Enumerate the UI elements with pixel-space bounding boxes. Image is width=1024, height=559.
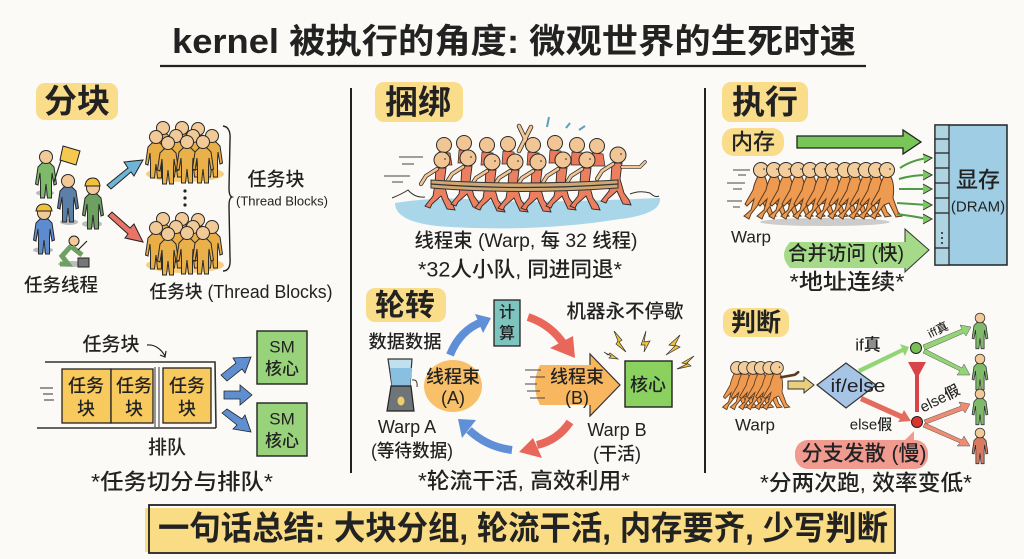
label: Warp A: (等待数据): [371, 441, 453, 461]
shape: thread bundle A: [424, 360, 482, 412]
label: 任务块 (Thread Blocks): 任务块 (Thread Blocks): [150, 282, 332, 302]
shape: thread bundle A: 线程束: [426, 367, 480, 387]
arrows: queue to SM cores: [221, 357, 252, 432]
label: else假: else假: [850, 416, 892, 434]
icon: dots: [183, 189, 187, 207]
label: 任务块 Thread Blocks: [236, 168, 328, 208]
caption: 轮流干活: *轮流干活, 高效利用*: [418, 468, 630, 494]
arrow: merged access: [784, 229, 929, 272]
label: 内存: [722, 128, 784, 156]
block 1: 块: [77, 399, 95, 419]
icon: person 2: [972, 354, 988, 390]
icon: blender: [387, 359, 417, 411]
illustration: dragon boat team: [384, 117, 660, 228]
title: kernel 被执行的角度: 微观世界的生死时速: [172, 23, 856, 61]
icon: SM core 2: 核心: [265, 432, 299, 450]
label: Warp B: Warp B: [587, 420, 647, 440]
caption: 分两次跑: *分两次跑, 效率变低*: [760, 470, 972, 496]
icon: DRAM: 显存: [956, 168, 1000, 192]
label: Warp A: Warp A: [378, 417, 436, 437]
block 3: 块: [178, 399, 196, 419]
arrow: merged access: 合并访问 (快): [788, 242, 904, 265]
label: 机器永不停歇: 机器永不停歇: [566, 300, 684, 322]
callout: 分支发散: [795, 431, 928, 469]
label: 数据数据: 数据数据: [368, 332, 442, 352]
arrow: to decision: [788, 377, 814, 393]
label: 任务块 Thread Blocks: (Thread Blocks): [236, 194, 328, 208]
icon: top crowd: [146, 122, 224, 184]
icon: SM core 1: [257, 331, 307, 384]
illustration: warp small team: [723, 362, 798, 410]
caption: 任务切分与排队: *任务切分与排队*: [91, 470, 273, 494]
heading: 执行: 执行: [732, 84, 798, 120]
label: if真: if真: [855, 336, 881, 354]
arrow: red lower: [519, 422, 570, 458]
icon: green node: [910, 342, 922, 354]
icon: person 3: [972, 389, 988, 425]
heading: 分块: 分块: [44, 82, 110, 120]
caption: 32人小队: *32人小队, 同进同退*: [418, 258, 622, 282]
icon: SM core 2: SM: [269, 410, 295, 428]
illustration: warp team walking: [727, 162, 902, 226]
icon: bottom crowd: [146, 212, 224, 275]
arrow: red to bottom block: [108, 212, 143, 242]
icon: compute box: [494, 300, 520, 346]
label: rotated false branch: else假: [917, 382, 963, 416]
icon: if/else diamond: if/else: [830, 376, 886, 396]
block 3: 任务: [169, 376, 205, 396]
label: Warp B: [587, 420, 647, 464]
arrows: small green to memory: [897, 154, 932, 224]
caption: 地址连续: *地址连续*: [790, 270, 905, 294]
icon: compute box: 计: [499, 304, 515, 322]
label: 线程束: 线程束 (Warp, 每 32 线程): [414, 230, 638, 252]
label: 任务块 Thread Blocks: 任务块: [247, 168, 305, 190]
block 1: [62, 369, 111, 423]
icon: DRAM: [935, 125, 1007, 265]
label: 任务块 queue: 任务块: [82, 334, 140, 356]
label: Warp A: [371, 417, 453, 461]
icon: DRAM: (DRAM): [951, 198, 1005, 216]
block 2: 任务: [116, 376, 152, 396]
icons: outcome people: [972, 313, 988, 349]
icon: core: [625, 361, 672, 407]
icon: task thread workers: [33, 146, 104, 267]
label: 排队: 排队: [148, 436, 186, 458]
label: Warp: Warp: [735, 416, 775, 434]
icon: red I-beam: [908, 362, 926, 412]
panel: 轮转 rotation: [366, 288, 694, 494]
callout: 分支发散: 分支发散 (慢): [802, 442, 926, 466]
heading: 捆绑: [375, 82, 463, 122]
brace: [223, 126, 232, 271]
icon: red node: [912, 416, 922, 428]
panel: 判断 branching: [723, 308, 988, 496]
shape: thread bundle B arrow: [525, 354, 620, 416]
block 2: 块: [125, 399, 143, 419]
icon: person 4: [972, 428, 988, 464]
label: rotated true branch: iff真: [925, 318, 951, 341]
arrows: branch paths: [858, 325, 971, 446]
heading: 轮转: 轮转: [375, 290, 435, 322]
icon: core: 核心: [630, 375, 666, 395]
icon: SM core 1: 核心: [265, 360, 299, 378]
icon: compute box: 算: [499, 324, 515, 342]
label: 任务线程: 任务线程: [24, 274, 98, 296]
block 1: 任务: [68, 376, 104, 396]
heading: 捆绑: 捆绑: [385, 84, 451, 120]
icon: SM core 1: SM: [269, 338, 295, 356]
icon: if/else diamond: [817, 363, 886, 408]
arrow: blue lower: [458, 419, 512, 450]
banner: summary: 一句话总结: 大块分组, 轮流干活, 内存要齐, 少写判断: [158, 510, 888, 546]
arrow: top green: [797, 130, 921, 154]
arrow: blue up: [450, 314, 491, 355]
shape: thread bundle B arrow: (B): [565, 388, 589, 408]
arrow: blue to top block: [107, 160, 143, 189]
label: Warp B: (干活): [593, 444, 641, 464]
block 3: [163, 368, 211, 423]
heading: 判断: 判断: [731, 309, 781, 337]
label: Warp: Warp: [731, 228, 771, 246]
panel: 捆绑 bundling: [375, 82, 660, 282]
icons: lightning: [604, 331, 694, 369]
arrow: red down: [528, 317, 575, 358]
panel: 分块 task blocks: [24, 82, 332, 494]
shape: thread bundle B arrow: 线程束: [550, 367, 604, 387]
arrow: curved pointer: [147, 345, 166, 357]
chart: queue: [37, 362, 216, 428]
label: 内存: 内存: [731, 130, 775, 154]
block 2: [111, 369, 153, 423]
icon: SM core 2: [257, 403, 307, 456]
panel: 执行 execution: [722, 82, 1007, 294]
shape: thread bundle A: (A): [441, 388, 465, 408]
